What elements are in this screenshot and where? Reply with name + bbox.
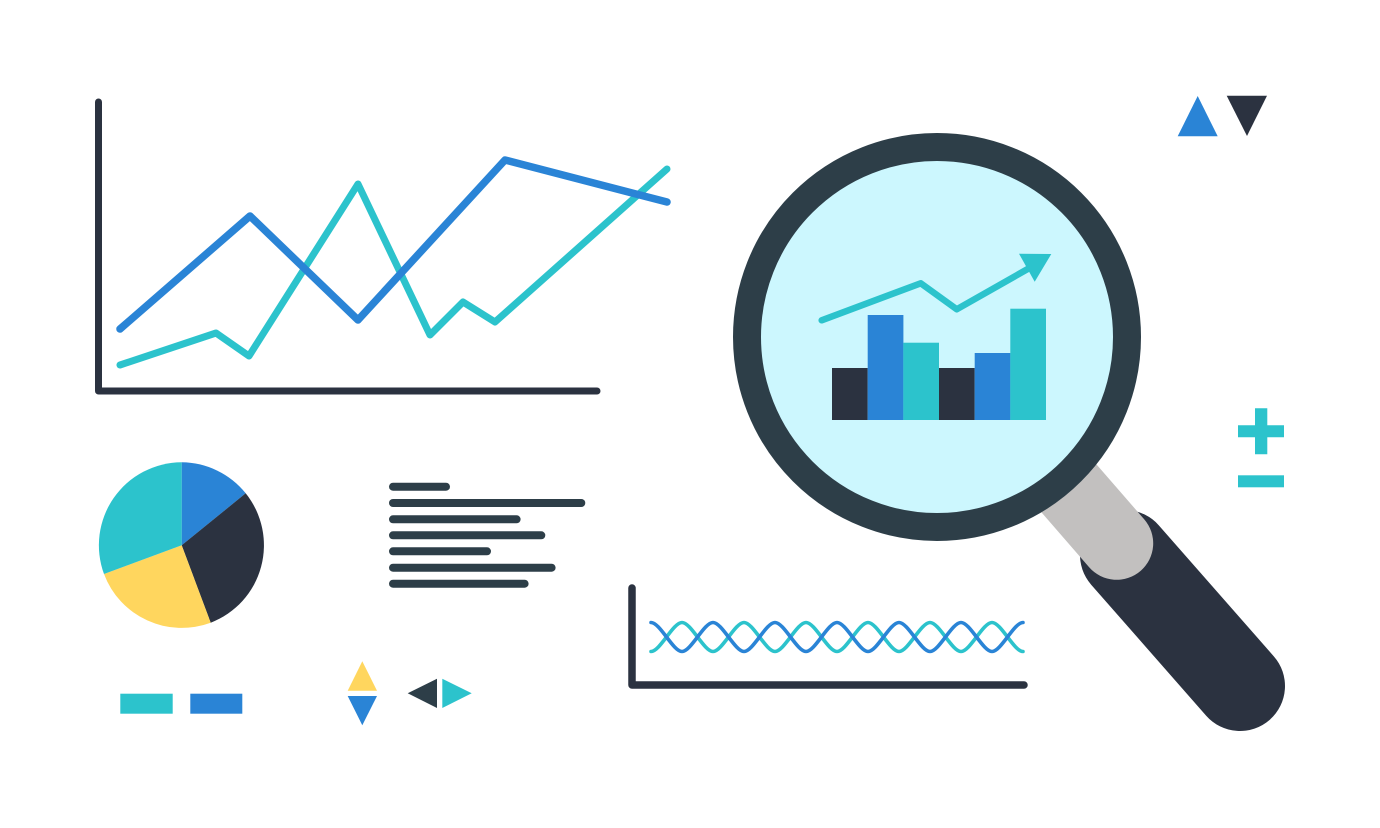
bar chart inside lens [832, 309, 1046, 420]
blue swatch [190, 694, 242, 714]
dark down triangle [1227, 96, 1267, 136]
teal data line [120, 169, 667, 365]
pie slice: teal [99, 462, 182, 574]
icon: vertical triangle pair [348, 661, 377, 725]
blue wave [651, 622, 1023, 652]
wave chart panel [632, 588, 1024, 685]
text placeholder lines [393, 487, 581, 584]
magnifier lens [760, 160, 1114, 514]
minus sign [1238, 475, 1284, 487]
teal swatch [120, 694, 173, 714]
magnifier ring [747, 147, 1127, 527]
blue up triangle [1178, 96, 1218, 136]
pie chart [99, 462, 264, 628]
icon: plus and minus [1238, 408, 1284, 487]
arrow: upward trend [822, 254, 1051, 320]
icon: triangles top right [1178, 96, 1267, 136]
pie slice: yellow [104, 545, 211, 628]
line chart panel [98, 102, 667, 391]
pie slice: dark [182, 493, 264, 623]
blue down triangle [348, 696, 377, 725]
magnifier handle grip [1125, 555, 1240, 686]
blue data line [120, 160, 667, 329]
wave chart axes [632, 588, 1024, 685]
teal wave [651, 622, 1023, 652]
icon: horizontal triangle pair [408, 679, 472, 708]
magnifying glass [747, 147, 1240, 686]
plus sign [1238, 408, 1284, 454]
dark left triangle [408, 679, 437, 708]
line chart axes [98, 102, 597, 391]
yellow up triangle [348, 661, 377, 691]
teal right triangle [442, 679, 472, 708]
magnifier neck [1040, 455, 1117, 543]
legend swatches [120, 694, 242, 714]
pie slice: blue [182, 462, 246, 545]
